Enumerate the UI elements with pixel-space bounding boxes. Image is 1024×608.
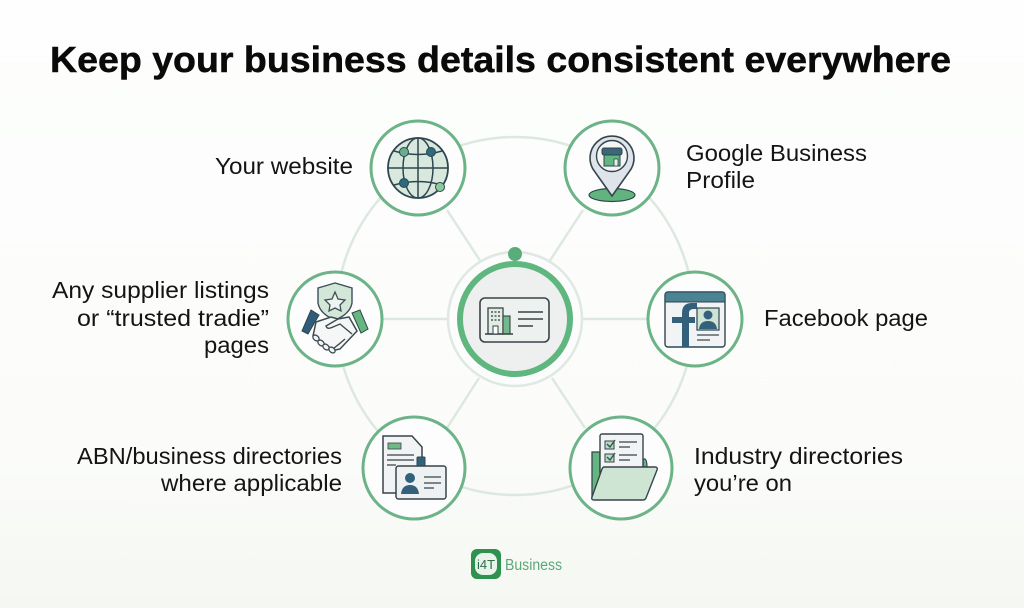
node: supplier listings <box>288 272 382 366</box>
label: supplier listings: Any supplier listings <box>52 277 269 303</box>
label: abn directories <box>77 443 342 496</box>
icon: map pin with store <box>589 136 635 202</box>
icon: document and id badge <box>383 436 446 499</box>
label: abn directories: ABN/business directories <box>77 443 342 469</box>
icon: shield and handshake <box>302 283 368 354</box>
label: your website: Your website <box>215 153 353 179</box>
label: google business profile: Google Business <box>686 140 867 166</box>
node: your website <box>371 121 465 215</box>
node: industry directories <box>570 417 672 519</box>
connector ring and spokes <box>336 137 694 495</box>
label: facebook page: Facebook page <box>764 305 928 331</box>
label: google business profile <box>686 140 867 193</box>
label: supplier listings: pages <box>204 332 269 358</box>
logo: i4T <box>477 557 495 572</box>
icon: globe <box>388 138 448 198</box>
icon: folder with checklist <box>592 434 657 500</box>
label: google business profile: Profile <box>686 167 755 193</box>
label: abn directories: where applicable <box>160 470 342 496</box>
node: abn directories <box>363 417 465 519</box>
icon: facebook profile window <box>665 292 725 347</box>
label: supplier listings: or “trusted tradie” <box>77 305 269 331</box>
node: google business profile <box>565 121 659 215</box>
title: Keep your business details consistent everywhere <box>50 39 951 80</box>
label: industry directories: you’re on <box>694 470 792 496</box>
label: industry directories: Industry directories <box>694 443 903 469</box>
label: supplier listings <box>52 277 269 358</box>
logo: Business <box>505 557 562 574</box>
node: facebook page <box>648 272 742 366</box>
logo <box>471 549 562 579</box>
label: industry directories <box>694 443 903 496</box>
central hub: business card <box>448 247 582 386</box>
